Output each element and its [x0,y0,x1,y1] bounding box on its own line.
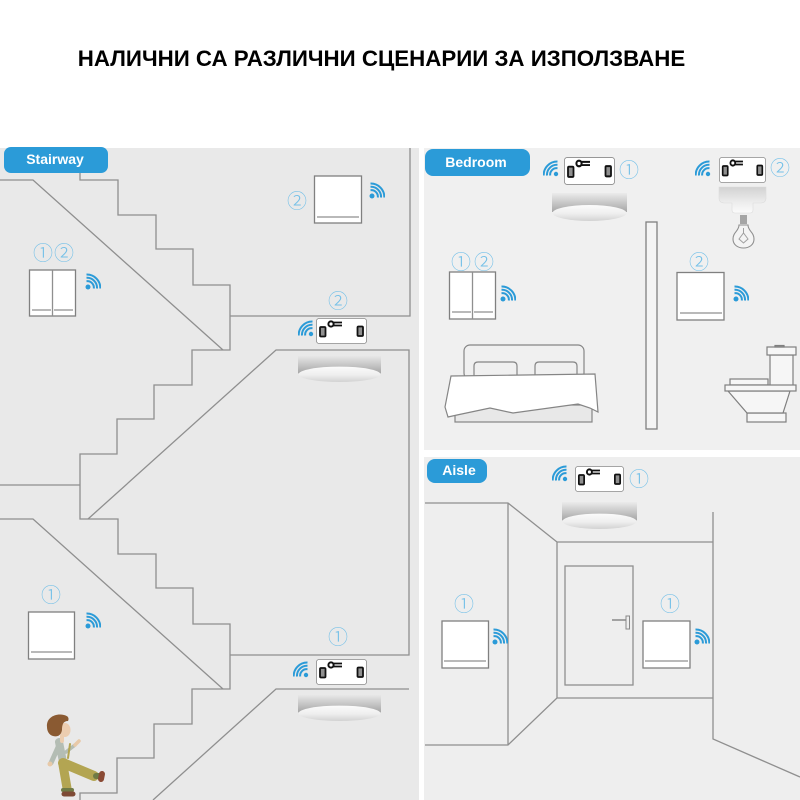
ceiling lamps [298,355,381,721]
ceiling lamp [552,193,627,221]
badge: Bedroom: Bedroom [445,154,507,170]
numbers: ② [770,152,790,181]
receivers [564,158,766,184]
numbers: ② [328,285,348,314]
numbers: ① [454,588,474,617]
icons: wireless signals [492,466,709,644]
door [565,566,633,685]
toilet [725,346,796,422]
numbers: ① [451,246,471,275]
numbers: ② [689,246,709,275]
panel: bedroom [424,148,800,450]
badge: Aisle [427,459,487,483]
numbers: ① [41,579,61,608]
numbers: ② [54,237,74,266]
receiver [575,466,624,492]
numbers: ② [474,246,494,275]
socket and light bulb [719,187,766,248]
badge: Bedroom [425,149,530,176]
figure: walking boy [47,715,102,794]
ceiling lamp [562,502,637,529]
stair lines [0,148,410,800]
numbers: ② [287,185,307,214]
switches [442,621,690,668]
switch: double [450,272,496,319]
switch: double [30,270,76,316]
numbers: ① [619,154,639,183]
icons: wireless signals [86,183,384,677]
numbers: ① [33,237,53,266]
badge: Aisle: Aisle [442,462,476,478]
numbers [451,152,790,275]
panel: aisle [424,457,800,800]
numbers [454,463,680,617]
numbers: ① [660,588,680,617]
numbers: ① [328,621,348,650]
numbers [33,185,348,650]
room lines [425,503,800,777]
numbers: ① [629,463,649,492]
title: НАЛИЧНИ СА РАЗЛИЧНИ СЦЕНАРИИ ЗА ИЗПОЛЗВАНЕ [78,46,685,71]
panel: stairway [0,147,419,800]
switch: lower single [28,612,74,659]
badge: Stairway [4,147,108,173]
badge: Stairway: Stairway [26,151,84,167]
switch: single [677,272,724,320]
wall divider [646,222,657,429]
bed [445,345,598,422]
icons: wireless signals [500,161,748,302]
receivers [316,318,366,684]
switch: upper single [314,176,362,223]
